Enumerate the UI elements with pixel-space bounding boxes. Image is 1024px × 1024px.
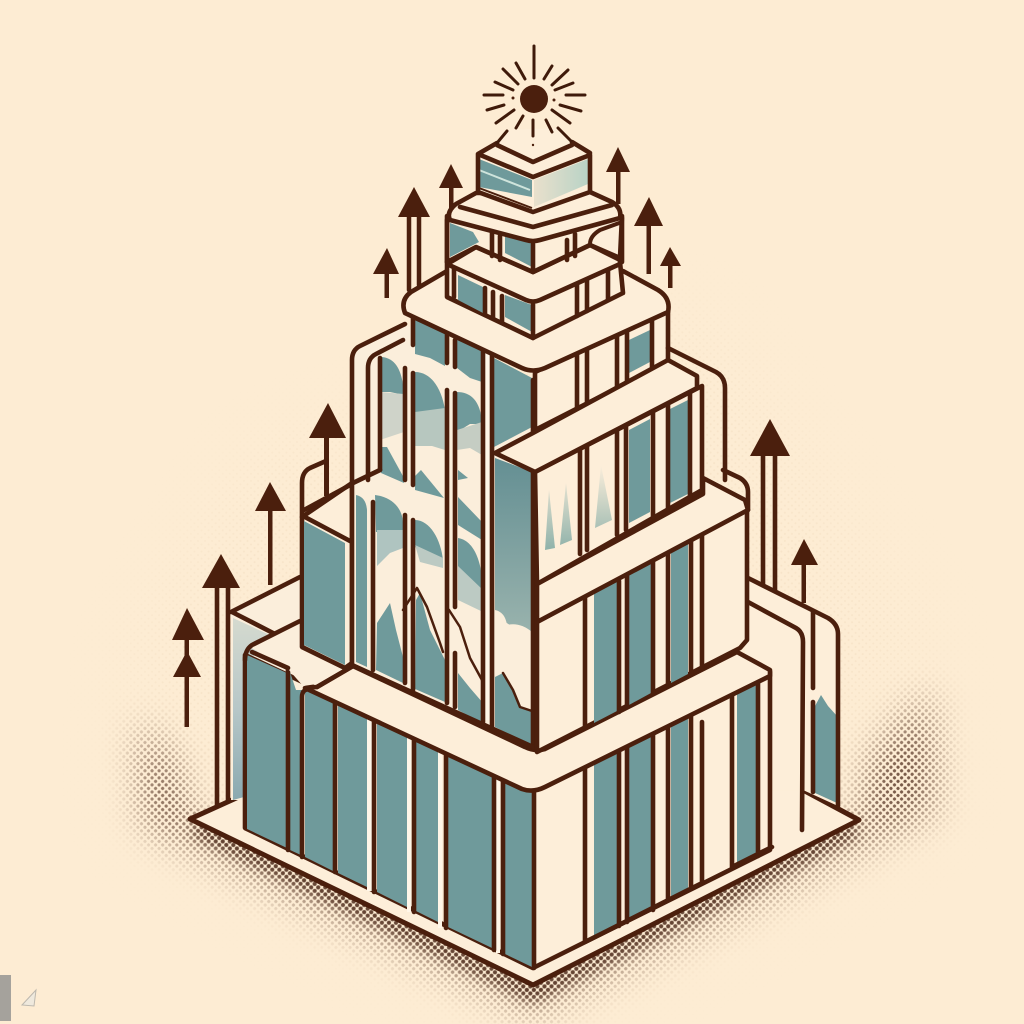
tier four upper wall (447, 216, 622, 272)
wall dividers and teal (577, 313, 652, 408)
pale panels with streaks (545, 465, 612, 550)
right back lines (668, 348, 725, 480)
sun icon (484, 46, 585, 146)
arrow: small upper right (660, 247, 681, 288)
arrow: small right (791, 539, 818, 603)
arrow: double shaft left (202, 554, 240, 805)
wing pale window (233, 618, 272, 800)
upper right roof slab (495, 360, 697, 472)
wing teal window (815, 695, 837, 803)
tier two roof slab (537, 470, 748, 622)
cap glass left (479, 159, 532, 197)
upper tier arches (380, 357, 482, 455)
base front wall (245, 655, 770, 968)
central column with snowy mountains (352, 318, 533, 748)
tier four top plate (449, 192, 620, 241)
lower tier arches (356, 495, 483, 667)
arrow: double shaft upper left (398, 187, 430, 290)
upper tier mountains (381, 447, 482, 540)
base teal gap (290, 672, 303, 856)
base right panels (594, 682, 757, 938)
watermark (0, 975, 36, 1021)
arrow: lower left (255, 482, 286, 585)
arrow: top right (606, 147, 630, 204)
base left dividers (288, 668, 534, 968)
base left panels (247, 655, 532, 967)
tower wall below roof right (535, 308, 668, 430)
base roof slab (245, 621, 770, 791)
arrow: small upper left (373, 248, 399, 298)
base block (245, 655, 772, 968)
back left wing (231, 577, 350, 800)
tier two right wall (537, 510, 747, 752)
arrow: mid left (309, 403, 346, 496)
arrow: double shaft right (750, 419, 790, 590)
cap glass right (534, 159, 588, 207)
arrow: stacked far left (172, 608, 204, 727)
right tall panels (485, 350, 532, 746)
small left roof (250, 621, 352, 686)
top cap block (478, 128, 590, 212)
column lines (352, 324, 405, 665)
arrow: top left (439, 164, 463, 210)
left box tier (302, 461, 352, 668)
back right wing (745, 577, 838, 830)
upper right wall (535, 386, 702, 584)
ground platform (190, 790, 859, 985)
tier three roof slab (403, 271, 669, 370)
tier four plate two (449, 245, 620, 302)
growth arrows (172, 147, 818, 805)
left box teal panel (304, 521, 345, 665)
crack lines (403, 588, 532, 711)
lower tier mountains (376, 593, 483, 724)
base right dividers (585, 682, 772, 942)
arrow: upper right (634, 197, 663, 274)
tier four lower wall (447, 262, 623, 338)
teal windows under roof (415, 318, 482, 382)
halftone ground shadow (109, 356, 962, 1024)
